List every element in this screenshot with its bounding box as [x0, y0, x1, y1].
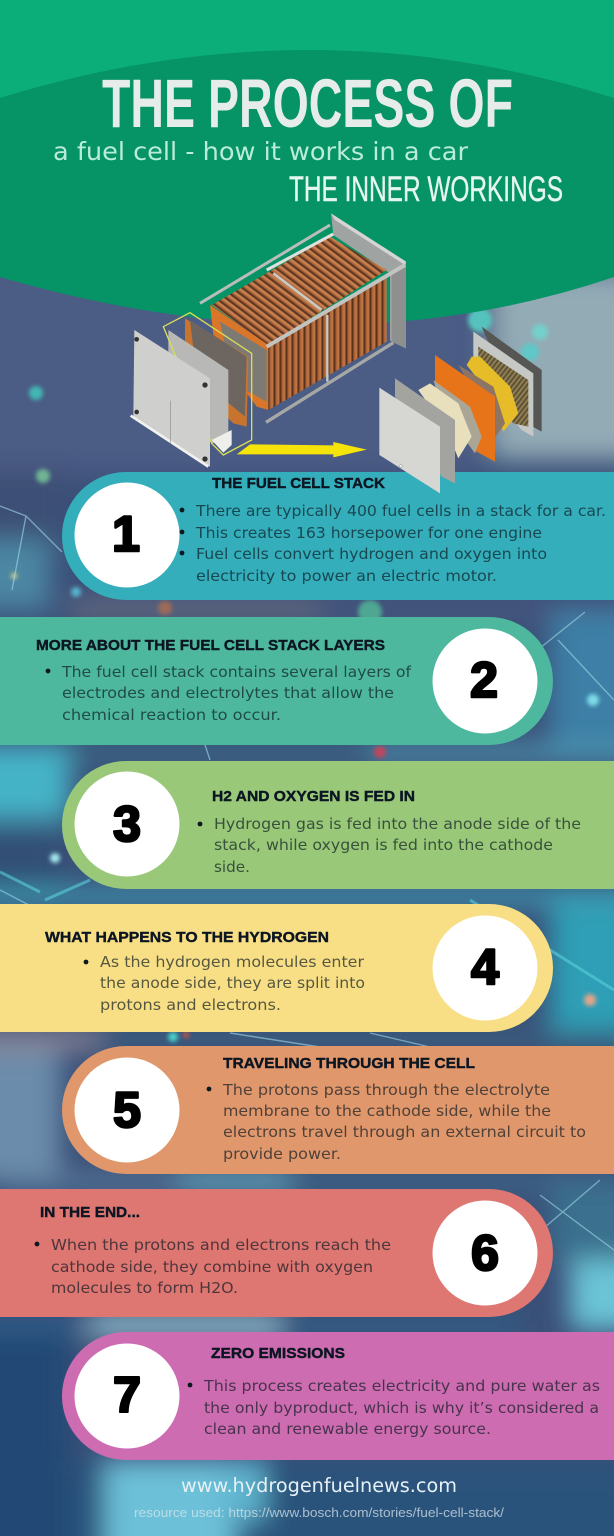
dark green header ellipse [0, 50, 614, 325]
body text 6 [51, 1236, 391, 1297]
heading 5: TRAVELING THROUGH THE CELL [223, 1055, 475, 1072]
body text 2 [61, 663, 412, 724]
number 2: 2 [470, 652, 498, 708]
body text 1: There are typically 400 fuel cells in a stack for a car. [195, 502, 606, 520]
right light bokeh under header [468, 308, 548, 377]
exploded cell layers [379, 327, 542, 493]
body text 7: This process creates electricity and pure water as [203, 1377, 600, 1395]
panel 1: the fuel cell stack [62, 472, 614, 600]
body text 7: the only byproduct, which is why it’s considered a [204, 1399, 599, 1417]
body text 1: Fuel cells convert hydrogen and oxygen into [196, 545, 547, 563]
heading 2: MORE ABOUT THE FUEL CELL STACK LAYERS [36, 637, 385, 654]
body text 5 [222, 1081, 586, 1163]
body text 6: molecules to form H2O. [51, 1279, 238, 1297]
body text 2: The fuel cell stack contains several layers of [61, 663, 412, 681]
body text 3: Hydrogen gas is fed into the anode side of the [214, 815, 581, 833]
body text 5: provide power. [223, 1145, 341, 1163]
body text 4: protons and electrons. [100, 996, 281, 1014]
bokeh dots and light lines [0, 386, 614, 1250]
body text 2: electrodes and electrolytes that allow the [62, 684, 394, 702]
number 4: 4 [471, 939, 499, 995]
body text 3 [214, 815, 581, 876]
subtitle: a fuel cell - how it works in a car [53, 137, 469, 166]
body text 7 [203, 1377, 600, 1438]
heading 7: ZERO EMISSIONS [211, 1345, 345, 1362]
number 5: 5 [113, 1082, 141, 1138]
heading 3: H2 AND OXYGEN IS FED IN [212, 788, 415, 805]
body text 5: membrane to the cathode side, while the [223, 1102, 551, 1120]
body text 4: the anode side, they are split into [100, 974, 365, 992]
bullet 3 [198, 822, 202, 826]
body text 1 [195, 502, 606, 585]
bullet 7 [188, 1383, 192, 1387]
heading 4: WHAT HAPPENS TO THE HYDROGEN [45, 929, 329, 946]
front cover plate [131, 330, 210, 467]
yellow arrow [237, 442, 367, 457]
number 3: 3 [113, 796, 141, 852]
panel 3: H2 and oxygen [62, 761, 614, 889]
body text 6: cathode side, they combine with oxygen [51, 1258, 373, 1276]
body text 5: electrons travel through an external circuit to [223, 1123, 586, 1141]
end cell module with yellow outline [163, 313, 252, 455]
bullets 1 [180, 508, 184, 555]
main stack [200, 213, 406, 422]
body text 2: chemical reaction to occur. [62, 706, 281, 724]
heading 1: THE FUEL CELL STACK [212, 475, 385, 492]
heading 6: IN THE END... [40, 1204, 140, 1221]
fuel cell stack illustration [131, 213, 542, 493]
body text 5: The protons pass through the electrolyte [222, 1081, 550, 1099]
green header band [0, 0, 614, 110]
bullet 6 [35, 1242, 39, 1246]
body text 3: side. [214, 858, 250, 876]
body text 1: This creates 163 horsepower for one engine [195, 524, 542, 542]
panel 7: zero emissions [62, 1332, 614, 1460]
number 6: 6 [471, 1225, 499, 1281]
number 7: 7 [113, 1367, 141, 1423]
panel 4: what happens to the hydrogen [0, 904, 553, 1032]
body text 7: clean and renewable energy source. [204, 1420, 491, 1438]
number 1: 1 [112, 506, 140, 562]
body text 4 [100, 953, 365, 1014]
bullet 5 [207, 1087, 211, 1091]
body text 1: electricity to power an electric motor. [196, 567, 497, 585]
panel 2: stack layers [0, 617, 553, 745]
panel 5: traveling through the cell [62, 1046, 614, 1174]
footer website: www.hydrogenfuelnews.com [181, 1474, 457, 1497]
body text 6: When the protons and electrons reach the [51, 1236, 391, 1254]
footer resource: resource used: https://www.bosch.com/stories/fuel-cell-stack/ [134, 1505, 504, 1520]
body text 3: stack, while oxygen is fed into the cathode [214, 836, 553, 854]
bullet 4 [84, 960, 88, 964]
panel 6: in the end [0, 1189, 553, 1317]
body text 4: As the hydrogen molecules enter [100, 953, 365, 971]
bullet 2 [46, 669, 50, 673]
